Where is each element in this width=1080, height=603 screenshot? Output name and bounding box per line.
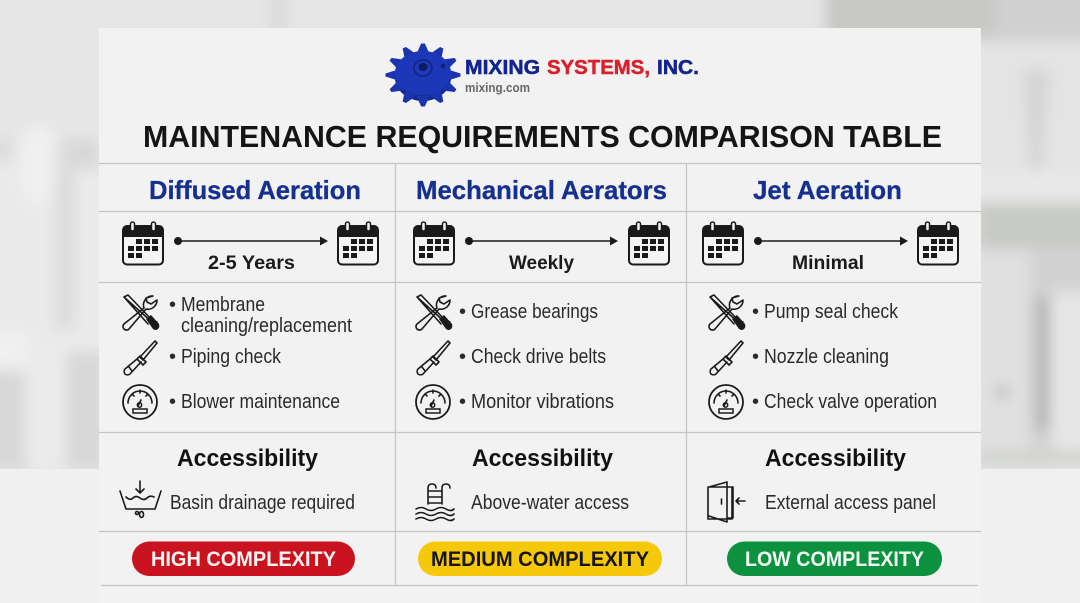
accessibility heading: Accessibility [472, 445, 614, 472]
timeline: minimal [703, 222, 958, 274]
maintenance list: Monitor vibrations [471, 391, 614, 413]
maintenance list [169, 294, 352, 413]
timeline: 2-5 years [123, 222, 378, 274]
badge: low complexity: LOW COMPLEXITY [745, 548, 924, 571]
maintenance list: • [169, 391, 176, 413]
access text: Basin drainage required [170, 492, 355, 514]
timeline: weekly [414, 222, 669, 274]
maintenance list: Nozzle cleaning [764, 346, 889, 368]
maintenance list: • [459, 346, 466, 368]
maintenance list: Piping check [181, 346, 282, 368]
icon: tools [123, 295, 159, 330]
maintenance list: Pump seal check [764, 301, 899, 323]
badge: low complexity [727, 542, 942, 576]
column 3: Jet Aeration [703, 175, 958, 576]
icon: blue gear [386, 44, 460, 106]
column 2: Mechanical Aerators [414, 175, 669, 576]
maintenance list: • [459, 391, 466, 413]
maintenance list: • [169, 294, 176, 316]
heading: Mechanical Aerators [416, 175, 667, 205]
badge: high complexity: HIGH COMPLEXITY [151, 548, 336, 571]
badge: medium complexity [418, 542, 662, 576]
maintenance list: • [459, 301, 466, 323]
maintenance list: Check valve operation [764, 391, 937, 413]
maintenance list: • [752, 301, 759, 323]
icon: gauge [416, 385, 450, 419]
badge: high complexity [132, 542, 355, 576]
main panel [99, 28, 981, 603]
timeline: minimal: Minimal [792, 253, 864, 274]
maintenance list: • [752, 346, 759, 368]
maintenance list: Grease bearings [471, 301, 598, 323]
maintenance list [459, 301, 614, 413]
logo: SYSTEMS, [547, 57, 650, 79]
heading: Diffused Aeration [149, 175, 361, 205]
badge: medium complexity: MEDIUM COMPLEXITY [431, 548, 649, 571]
maintenance list: cleaning/replacement [181, 315, 352, 337]
maintenance list: Membrane [181, 294, 265, 316]
logo [386, 44, 699, 106]
heading: Jet Aeration [753, 175, 902, 205]
access text: Above-water access [471, 492, 629, 514]
access text: External access panel [765, 492, 936, 514]
company name: MIXING [465, 57, 540, 79]
table grid [99, 163, 981, 586]
timeline: 2-5 years: 2-5 Years [208, 253, 295, 274]
icon: screwdriver [710, 341, 743, 375]
maintenance list: • [752, 391, 759, 413]
icon: screwdriver [124, 341, 157, 375]
icon: gauge [709, 385, 743, 419]
maintenance list: • [169, 346, 176, 368]
accessibility heading: Accessibility [177, 445, 319, 472]
title: MAINTENANCE REQUIREMENTS COMPARISON TABLE [143, 119, 942, 154]
icon: pool ladder [416, 484, 454, 520]
column 1: Diffused Aeration [120, 175, 378, 576]
icon: access door [708, 482, 745, 522]
accessibility heading: Accessibility [765, 445, 907, 472]
icon: tools [709, 295, 745, 330]
maintenance list: Blower maintenance [181, 391, 340, 413]
icon: basin drainage [120, 481, 161, 518]
timeline: weekly: Weekly [509, 253, 574, 274]
icon: tools [416, 295, 452, 330]
website: mixing.com [465, 81, 530, 95]
logo: INC. [657, 57, 699, 79]
icon: screwdriver [417, 341, 450, 375]
icon: gauge [123, 385, 157, 419]
maintenance list: Check drive belts [471, 346, 606, 368]
maintenance list [752, 301, 937, 413]
